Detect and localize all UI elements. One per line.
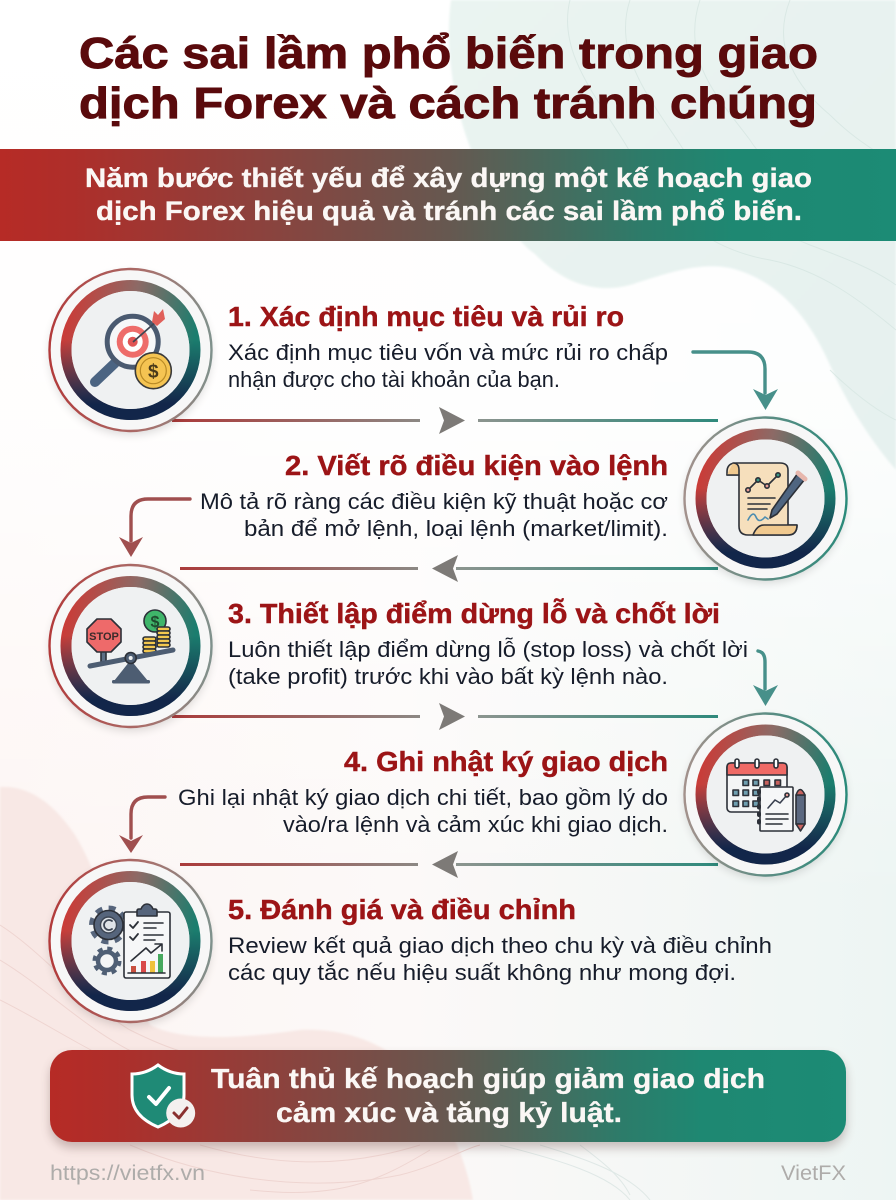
icon: scroll and pen — [727, 463, 805, 535]
step 3 heading: 3. Thiết lập điểm dừng lỗ và chốt lời — [228, 598, 720, 629]
title: dịch Forex và cách tránh chúng — [79, 79, 817, 128]
step 5 description: Review kết quả giao dịch theo chu kỳ và điều chỉnh — [228, 933, 772, 958]
step 2 badge — [684, 418, 846, 582]
step 2 heading: 2. Viết rõ điều kiện vào lệnh — [285, 450, 668, 481]
step 1 description: nhận được cho tài khoản của bạn. — [228, 367, 560, 392]
title: Các sai lầm phổ biến trong giao — [79, 29, 818, 78]
subtitle banner: dịch Forex hiệu quả và tránh các sai lầm phổ biến. — [96, 196, 802, 226]
step 5 — [50, 860, 772, 1025]
connector: step 4 to step 5 — [119, 797, 718, 878]
icon: target with magnifier and coin — [95, 309, 171, 389]
callout text: cảm xúc và tăng kỷ luật. — [276, 1097, 622, 1128]
step 1 badge — [50, 269, 212, 434]
step 1 — [50, 269, 668, 434]
step 3 description — [228, 637, 748, 689]
title — [79, 29, 818, 128]
step 4 badge — [684, 714, 846, 878]
step 2 description: bản để mở lệnh, loại lệnh (market/limit). — [244, 516, 668, 541]
step 4 — [178, 714, 846, 878]
footer brand: VietFX — [781, 1162, 846, 1185]
icon: shield with check — [132, 1065, 195, 1128]
step 4 description — [178, 785, 668, 837]
step 4 description: vào/ra lệnh và cảm xúc khi giao dịch. — [283, 812, 668, 837]
callout text — [211, 1063, 765, 1128]
icon: stop sign and coins on a balance — [87, 610, 173, 684]
step 2 description — [200, 489, 668, 541]
icon: stop sign and coins on a balance: STOP — [89, 631, 119, 643]
footer callout — [50, 1050, 846, 1148]
connector: step 3 to step 4 — [172, 651, 778, 730]
step 1 description: Xác định mục tiêu vốn và mức rủi ro chấp — [228, 340, 668, 365]
step 2 — [200, 418, 846, 582]
step 2 description: Mô tả rõ ràng các điều kiện kỹ thuật hoặc cơ — [200, 489, 668, 514]
step 4 heading: 4. Ghi nhật ký giao dịch — [344, 746, 668, 777]
connector: step 2 to step 3 — [119, 499, 718, 582]
subtitle banner: Năm bước thiết yếu để xây dựng một kế hoạch giao — [85, 163, 812, 193]
step 5 description: các quy tắc nếu hiệu suất không như mong đợi. — [228, 960, 736, 985]
step 5 description — [228, 933, 772, 985]
connector: step 1 to step 2 — [172, 352, 778, 434]
step 3 badge — [50, 565, 212, 730]
icon: gears and clipboard — [92, 904, 170, 978]
icon: target with magnifier and coin: $ — [148, 362, 159, 382]
step 3 description: Luôn thiết lập điểm dừng lỗ (stop loss) và chốt lời — [228, 637, 748, 662]
step 1 description — [228, 340, 668, 392]
step 1 heading: 1. Xác định mục tiêu và rủi ro — [228, 301, 624, 332]
step 5 badge — [50, 860, 212, 1025]
step 3 description: (take profit) trước khi vào bất kỳ lệnh nào. — [228, 664, 668, 689]
step 5 heading: 5. Đánh giá và điều chỉnh — [228, 894, 576, 925]
subtitle banner — [0, 149, 896, 241]
step 3 — [50, 565, 748, 730]
icon: calendar, notebook and pen — [727, 759, 805, 831]
step 4 description: Ghi lại nhật ký giao dịch chi tiết, bao gồm lý do — [178, 785, 668, 810]
icon: stop sign and coins on a balance: $ — [151, 614, 160, 631]
footer url: https://vietfx.vn — [50, 1162, 205, 1185]
callout text: Tuân thủ kế hoạch giúp giảm giao dịch — [211, 1063, 765, 1094]
